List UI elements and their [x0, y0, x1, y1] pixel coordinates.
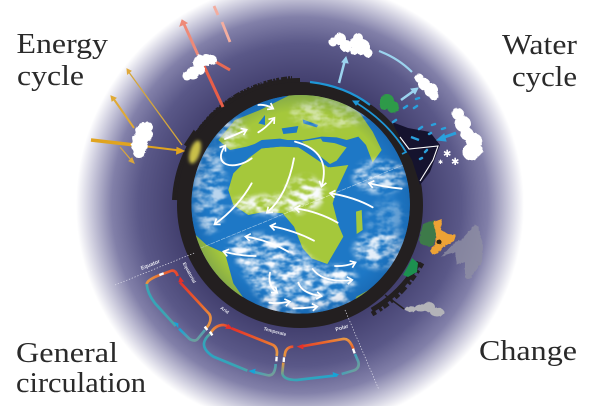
- evaporation arrow: [339, 57, 348, 83]
- blue dash: [411, 137, 419, 140]
- change: chimney smoke: [405, 302, 444, 316]
- cell 2: [204, 324, 277, 375]
- black ring: [177, 82, 423, 328]
- snow line: [400, 137, 438, 181]
- cloud: water 2: [414, 74, 438, 100]
- snowflakes: ✱: [443, 149, 451, 160]
- globe edge shading: [191, 95, 410, 314]
- labels: Temperate: [263, 326, 287, 337]
- scattered small arrow: [120, 147, 134, 163]
- title: Energy cycle: cycle: [17, 60, 84, 92]
- graticule lines: [200, 165, 403, 248]
- title: Water cycle: [502, 29, 577, 93]
- title: Change: Change: [479, 335, 577, 367]
- red reflected stub: [216, 62, 230, 70]
- title: Energy cycle: [16, 28, 109, 92]
- transpiration arrow: [401, 88, 418, 100]
- cloud: energy upper: [182, 54, 217, 80]
- title: Energy cycle: Energy: [16, 28, 109, 60]
- labels: Equatorial: [182, 261, 197, 284]
- title: General circulation: circulation: [16, 367, 147, 399]
- red outgoing lower beam: [204, 66, 223, 107]
- transport arc: [379, 51, 412, 72]
- title: General circulation: General: [16, 337, 118, 369]
- labels: Arid: [219, 305, 230, 315]
- change: green patch: [403, 258, 418, 277]
- skyline silhouette lower right: [372, 262, 422, 314]
- energy cycle arrows: [91, 6, 230, 163]
- sun glow: [187, 139, 203, 165]
- water cycle: [310, 51, 418, 154]
- inland seas: [254, 115, 336, 168]
- snowflakes: ✱: [451, 157, 459, 168]
- blue surface arc: [310, 82, 370, 105]
- general circulation: [115, 253, 378, 388]
- tree: [380, 94, 399, 113]
- mountain: [392, 122, 440, 185]
- wind arrows: [215, 105, 402, 308]
- cell 3: [282, 339, 359, 380]
- skyline silhouette upper left: [174, 78, 300, 200]
- title: General circulation: [16, 337, 147, 399]
- title: Water cycle: Water: [502, 29, 577, 61]
- snowflakes: ✱: [438, 159, 443, 166]
- rain arrow: [437, 133, 456, 141]
- rain drops: [393, 98, 445, 159]
- globe: [190, 90, 413, 317]
- change: smoke: [441, 225, 483, 279]
- red outgoing upper beam: [180, 20, 198, 55]
- title: Water cycle: cycle: [512, 61, 577, 93]
- incoming solar arrow: [91, 140, 184, 154]
- continents: [196, 95, 382, 299]
- blue runoff arc: [353, 101, 406, 154]
- sunlight reflected arrow long: [127, 69, 182, 145]
- labels: Polar: [335, 324, 349, 333]
- labels: Equator: [140, 259, 161, 272]
- dotted boundaries: [115, 253, 378, 388]
- reflected arrow from cloud: [111, 96, 134, 128]
- ocean: [191, 95, 410, 314]
- cloud: water 1: [328, 33, 372, 58]
- cell 1: [147, 271, 211, 340]
- change: chimney: [385, 295, 404, 309]
- labels: [140, 259, 349, 337]
- snowflakes: [438, 149, 459, 168]
- cloud: water 3: [452, 108, 483, 160]
- change: burning forest: [419, 219, 456, 255]
- cloud cover: [190, 90, 413, 317]
- cloud: energy lower: [131, 122, 153, 158]
- pale dashed beam: [214, 6, 230, 42]
